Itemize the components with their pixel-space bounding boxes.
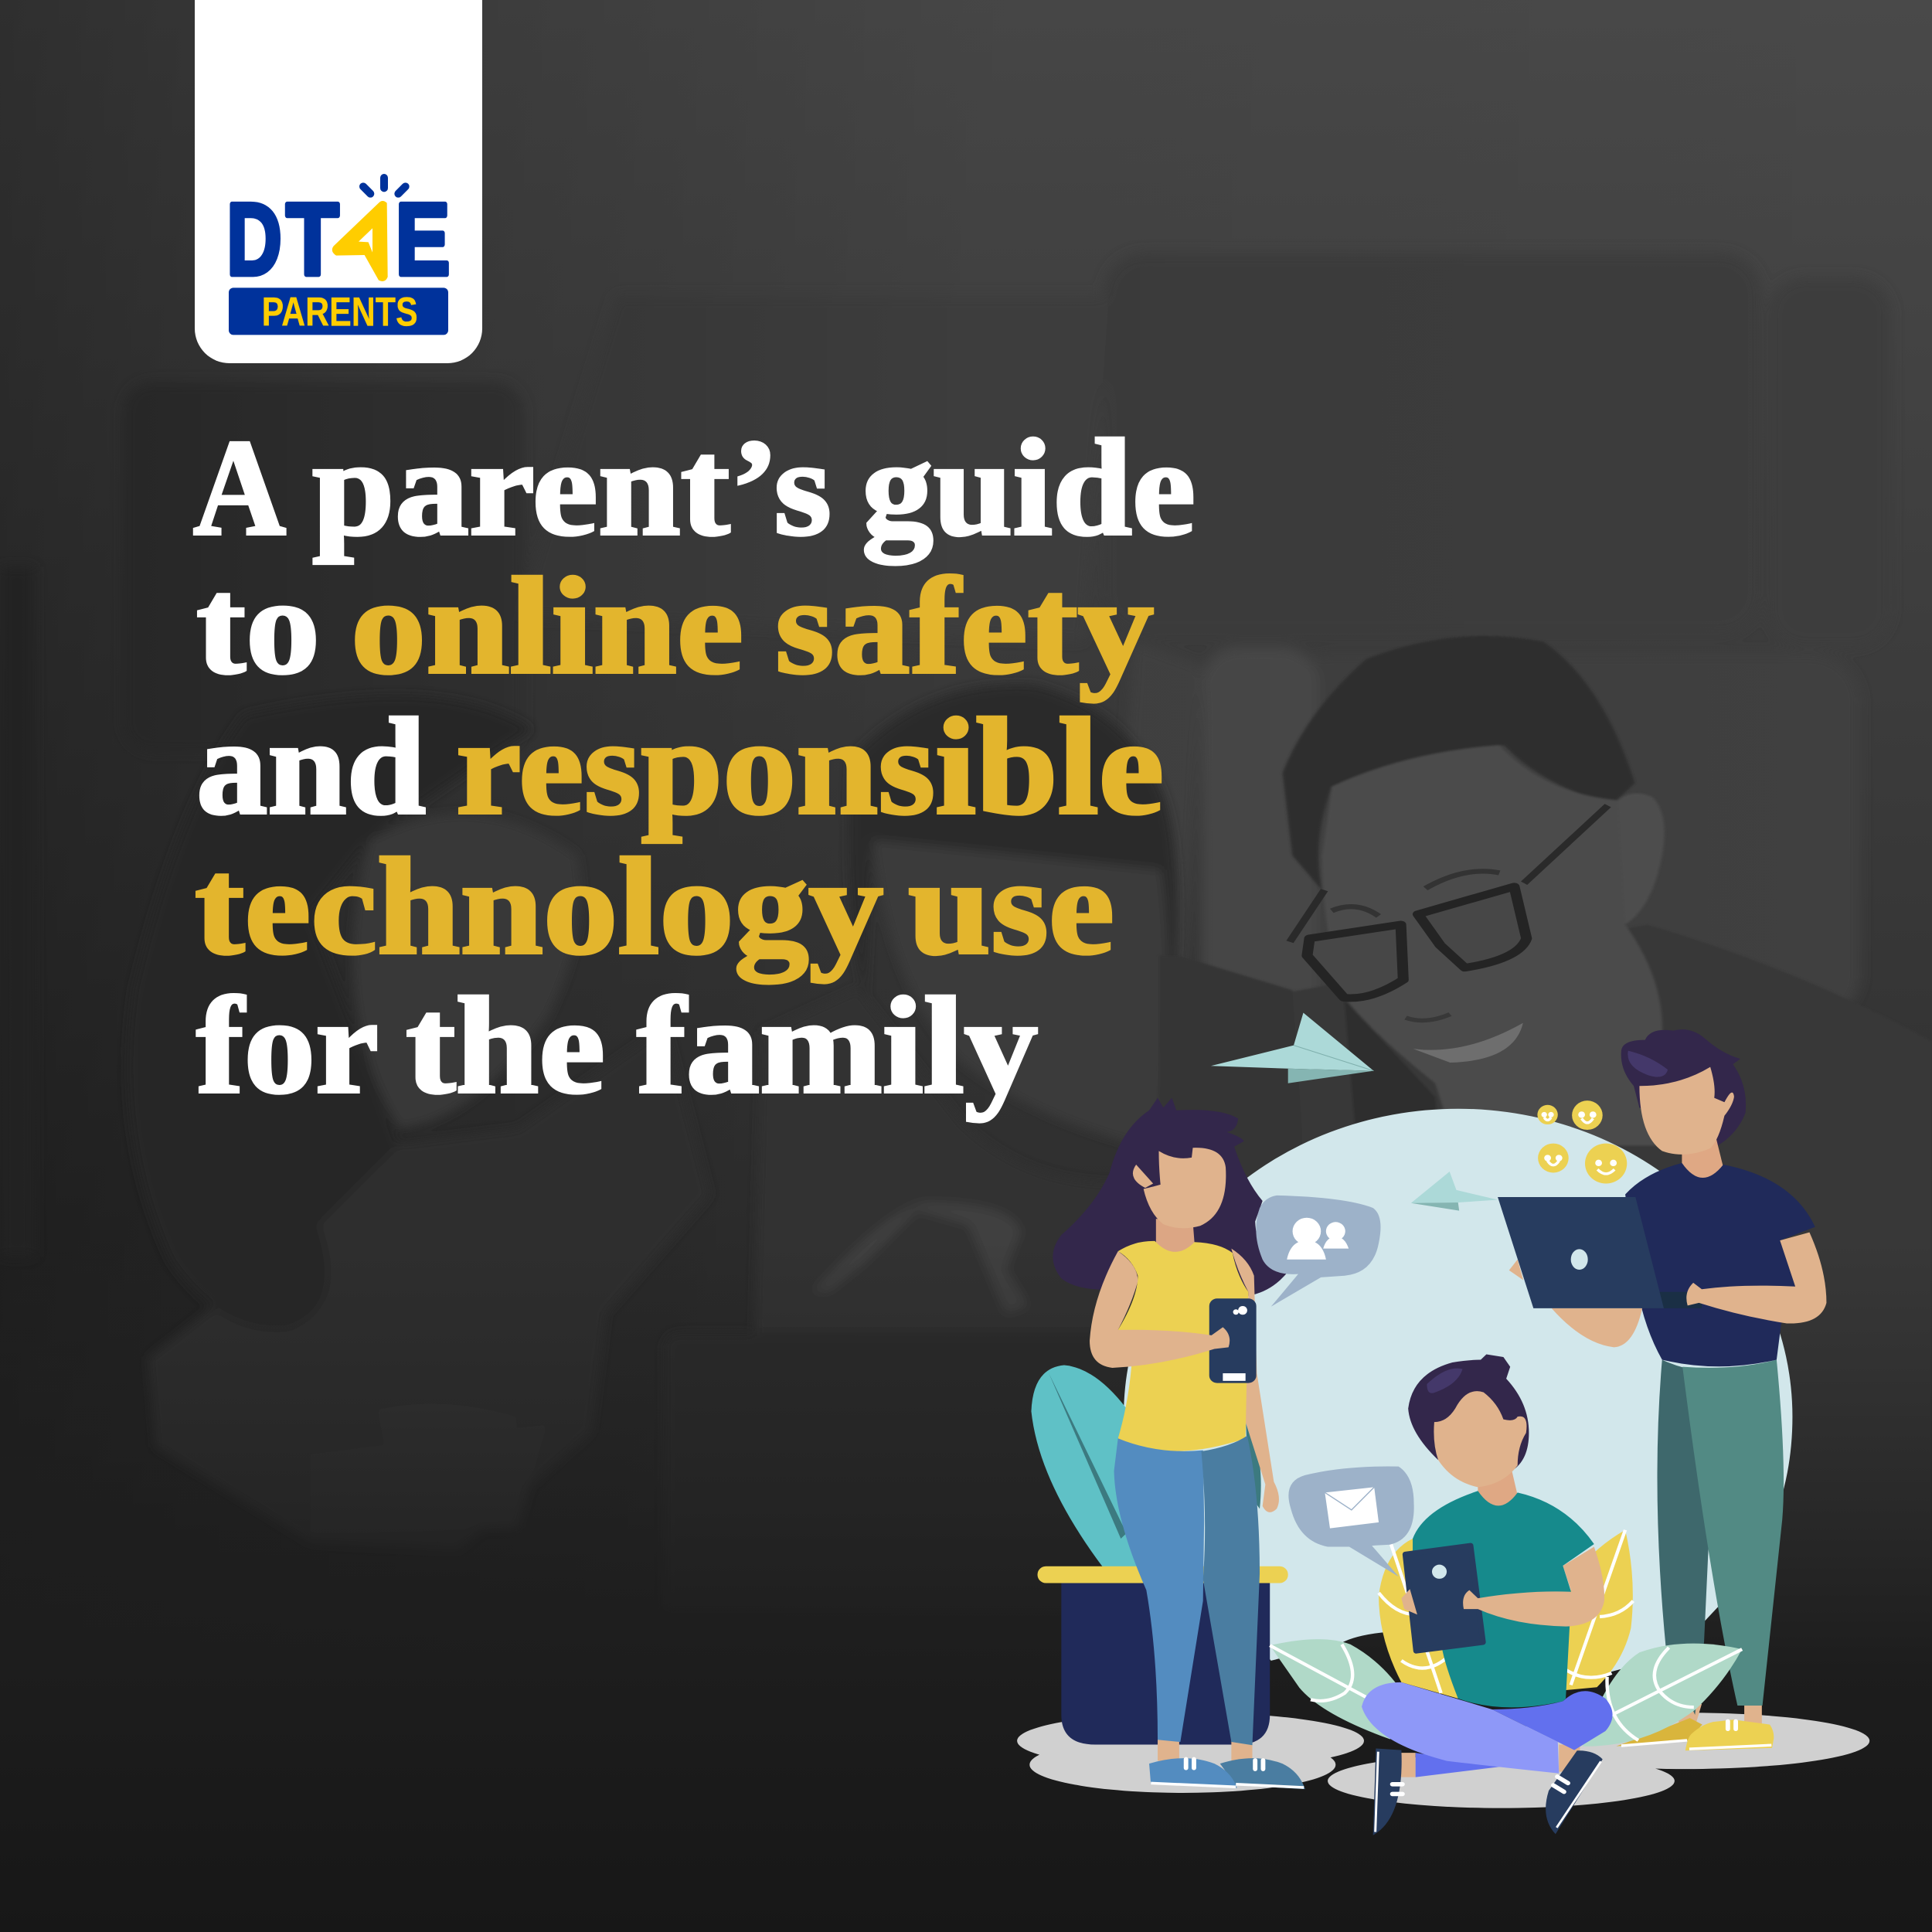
woman and girl in photo [127, 684, 1220, 1609]
title: online [351, 549, 743, 702]
title: A [193, 410, 286, 564]
paper plane large [1211, 1013, 1373, 1083]
title: use [908, 829, 1114, 983]
title: and [196, 689, 426, 843]
illustration: family using devices [1017, 1013, 1869, 1835]
logo: DT4E Parents: E [396, 182, 450, 296]
smiley icons [1537, 1100, 1627, 1183]
man's face in photo [1159, 636, 1932, 1925]
speech bubble: people icon [1256, 1196, 1380, 1307]
teal plant leaf [1031, 1365, 1261, 1569]
paper plane small [1411, 1172, 1498, 1211]
yellow leaves [1379, 1530, 1633, 1699]
title: guide [862, 410, 1196, 564]
title: for [196, 968, 379, 1122]
logo: DT4E Parents: T [286, 182, 338, 296]
light blue circle backdrop [1124, 1109, 1792, 1682]
title [193, 410, 1196, 1122]
logo: DT4E Parents: D [226, 182, 282, 296]
plant pot [1038, 1566, 1288, 1745]
title: safety [775, 549, 1154, 702]
logo: DT4E Parents [226, 178, 450, 335]
title: technology [195, 829, 883, 983]
speech bubble: envelope icon [1288, 1467, 1414, 1577]
title: the [406, 968, 605, 1122]
logo: DT4E Parents: PARENTS [262, 289, 418, 335]
green leaves [1270, 1639, 1742, 1747]
title: family [637, 968, 1038, 1122]
title: to [196, 549, 320, 702]
title: responsible [456, 689, 1164, 843]
logo panel [195, 0, 482, 363]
man's front shoe [1685, 1719, 1774, 1750]
boy with tablet [1362, 1354, 1613, 1835]
title: parent’s [312, 410, 832, 564]
woman with phone [1053, 1098, 1305, 1789]
man with laptop [1498, 1029, 1826, 1747]
floor shadows [1017, 1713, 1869, 1808]
